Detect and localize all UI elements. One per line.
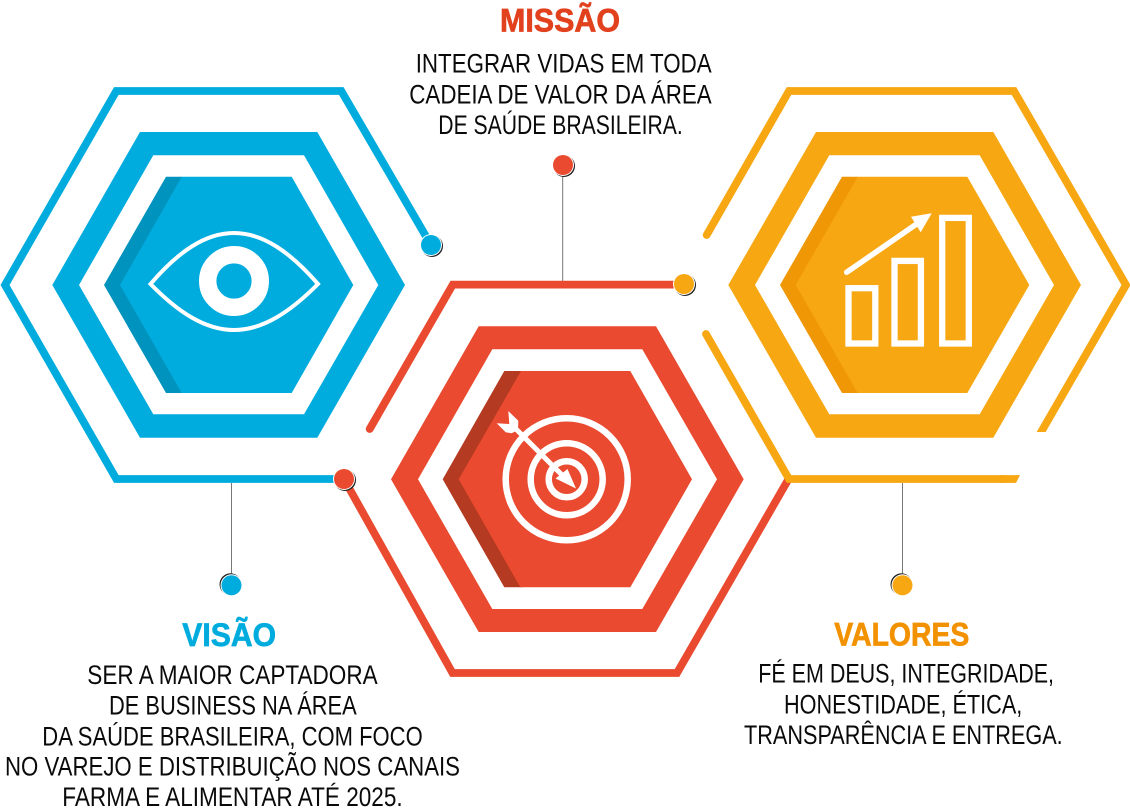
text block: missão — [409, 49, 712, 140]
text block: visão: DA SAÚDE BRASILEIRA, COM FOCO — [42, 721, 423, 751]
text block: valores: FÉ EM DEUS, INTEGRIDADE, — [758, 659, 1054, 689]
red middle ring — [391, 326, 744, 632]
pin: valores — [890, 483, 914, 596]
icon: target with arrow — [497, 411, 628, 540]
orange inner hexagon face — [796, 177, 1029, 393]
heading: missão: MISSÃO — [500, 3, 620, 39]
blue connector dot — [420, 234, 443, 257]
text block: missão: INTEGRAR VIDAS EM TODA — [416, 49, 712, 79]
heading: valores: VALORES — [834, 617, 969, 653]
red inner hexagon face — [459, 371, 692, 587]
orange connector dot — [673, 273, 696, 296]
orange middle ring — [728, 132, 1081, 438]
orange outer outline top — [707, 91, 1126, 451]
blue inner hexagon face — [120, 177, 353, 393]
blue outer outline — [5, 91, 431, 479]
panel: missão hexagon — [333, 285, 788, 673]
blue inner hexagon — [104, 177, 182, 393]
blue middle ring — [52, 132, 405, 438]
panel: valores hexagon — [673, 91, 1126, 483]
text block: valores: TRANSPARÊNCIA E ENTREGA. — [744, 720, 1063, 750]
red outer outline top — [370, 285, 676, 429]
text block: visão: SER A MAIOR CAPTADORA — [87, 660, 378, 690]
heading: visão: VISÃO — [182, 617, 276, 653]
icon: eye — [150, 233, 318, 330]
text block: visão: NO VAREJO E DISTRIBUIÇÃO NOS CANAIS — [5, 752, 460, 782]
text block: missão: CADEIA DE VALOR DA ÁREA — [409, 79, 712, 109]
text block: valores — [744, 659, 1063, 750]
pin: visão — [220, 483, 242, 596]
pin: missão — [552, 154, 575, 281]
icon: bar chart with rising arrow — [847, 213, 969, 344]
text block: valores: HONESTIDADE, ÉTICA, — [784, 689, 1022, 719]
text block: missão: DE SAÚDE BRASILEIRA. — [438, 110, 683, 140]
red connector dot — [333, 468, 356, 491]
panel: visão hexagon — [5, 91, 443, 479]
orange outer outline bottom — [706, 334, 1020, 483]
red inner hexagon shade — [443, 371, 522, 587]
orange inner hexagon shade — [780, 177, 858, 393]
text block: visão: DE BUSINESS NA ÁREA — [109, 690, 357, 720]
red outer outline bottom — [344, 479, 788, 673]
text block: visão — [5, 660, 460, 808]
